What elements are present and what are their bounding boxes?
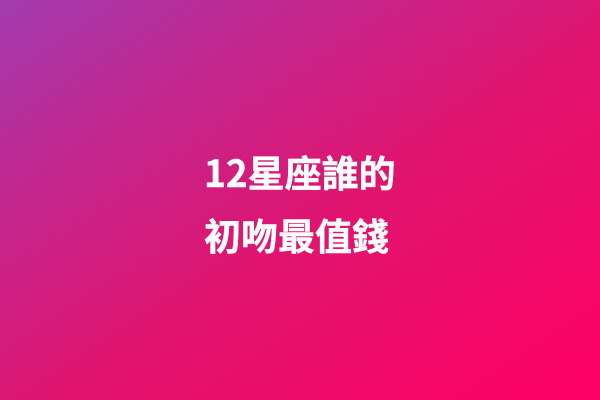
- title: 12星座誰的: [204, 144, 396, 198]
- title: [204, 144, 396, 261]
- title: 初吻最值錢: [204, 207, 389, 261]
